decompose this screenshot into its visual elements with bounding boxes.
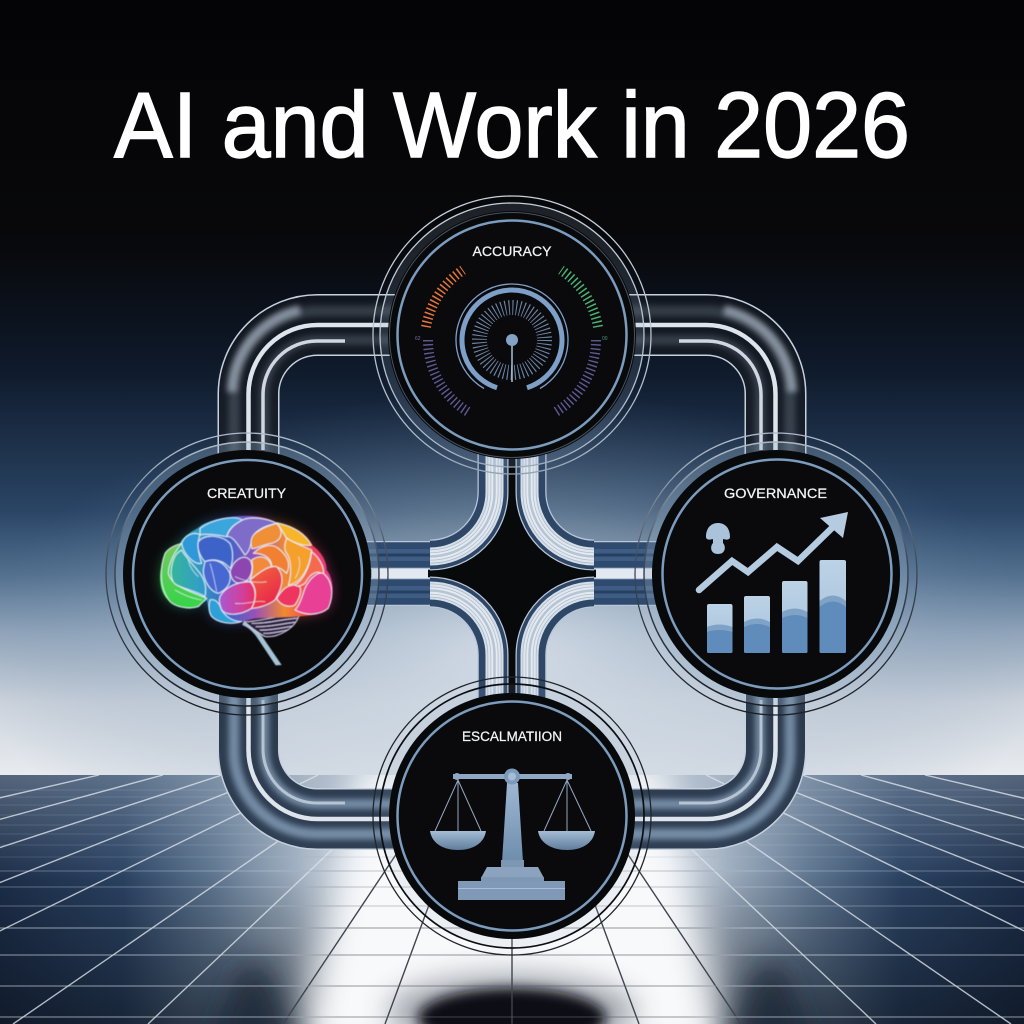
- floor: perspective tile grid: [0, 760, 1024, 1024]
- label: creativity: CREATUITY: [207, 486, 286, 501]
- node: accuracy gauge: [373, 196, 651, 474]
- brain stem: [242, 622, 282, 665]
- brain folds: [175, 557, 300, 604]
- label: escalation: ESCALMATIION: [462, 729, 562, 744]
- small gauge readouts: [415, 336, 608, 342]
- title: AI and Work in 2026: [114, 73, 910, 177]
- node: creativity brain: [106, 433, 388, 715]
- small gauge readouts: 00: [602, 336, 608, 342]
- trend arrow: [699, 512, 848, 590]
- label: governance: GOVERNANCE: [724, 486, 827, 501]
- icon: balance scale: [430, 768, 595, 900]
- inner pipes: four curved connectors: [365, 440, 659, 707]
- node: escalation scales: [373, 677, 651, 955]
- background: dark-to-light gradient sky: [0, 0, 1024, 775]
- outer pipe loop: [232, 310, 792, 834]
- cerebellum: [244, 615, 299, 637]
- small gauge readouts: 62: [415, 336, 421, 342]
- gauge dial: [426, 270, 598, 413]
- central black junction: [372, 455, 653, 700]
- node: governance chart: [635, 433, 917, 715]
- icon: rainbow brain: [160, 516, 333, 665]
- bar chart: [707, 560, 846, 653]
- label: accuracy: ACCURACY: [472, 244, 552, 259]
- icon: mushroom: [706, 523, 730, 554]
